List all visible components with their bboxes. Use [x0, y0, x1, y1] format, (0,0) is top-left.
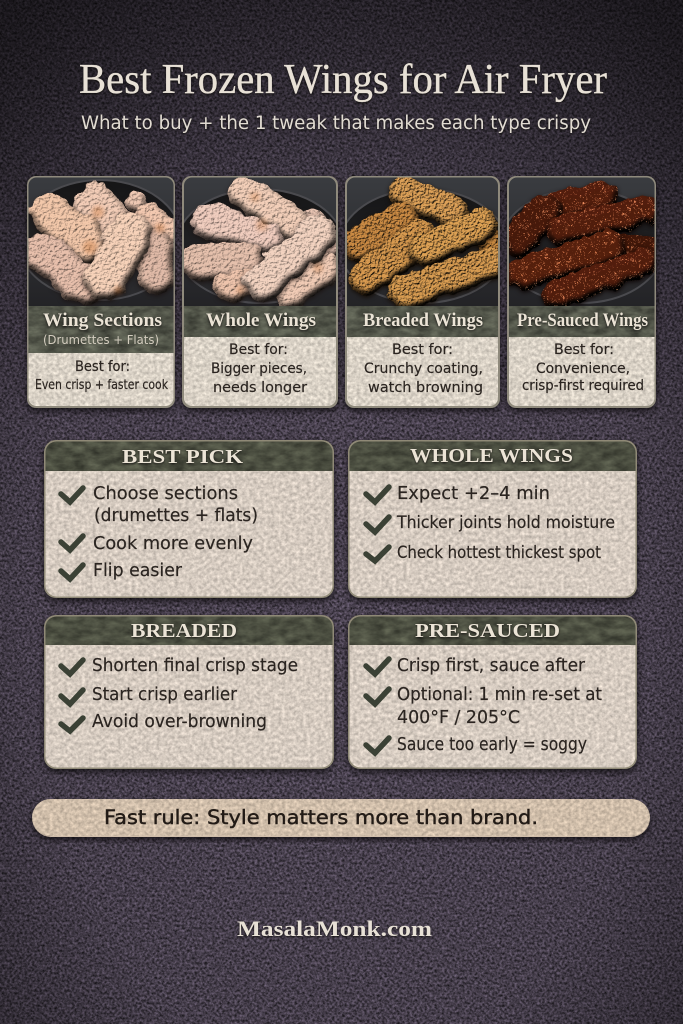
best for text: pre-sauced wings: Best for: — [554, 342, 614, 358]
panel: breaded tips — [44, 615, 334, 769]
photo: pre-sauced wings in bowl — [509, 178, 654, 306]
heading: breaded tips: BREADED — [131, 620, 237, 642]
card heading: pre-sauced wings: Pre-Sauced Wings — [517, 311, 648, 331]
photo: whole wings in bowl — [184, 178, 336, 306]
header band: whole wings tips — [348, 440, 637, 471]
best for text: whole wings: Best for: — [229, 342, 288, 358]
checklist: best pick: Choose sections — [93, 484, 238, 504]
panel: breaded wings card — [339, 176, 507, 408]
checklist: best pick: Flip easier — [93, 561, 183, 581]
card subheading: (Drumettes + Flats) — [43, 332, 159, 347]
heading: whole wings tips: WHOLE WINGS — [410, 445, 573, 467]
checklist: pre-sauced tips: Crisp first, sauce after — [397, 656, 586, 676]
best for text: pre-sauced wings: crisp-first required — [522, 378, 644, 394]
best for text: whole wings: needs longer — [213, 380, 307, 396]
heading: best pick: BEST PICK — [122, 446, 243, 468]
header band: wing sections — [27, 306, 175, 353]
body panel: breaded tips — [44, 645, 334, 769]
checklist: whole wings tips: Thicker joints hold moisture — [396, 513, 615, 532]
footer: site name: MasalaMonk.com — [237, 916, 432, 941]
checklist: pre-sauced tips: Sauce too early = soggy — [397, 735, 587, 755]
checklist: whole wings tips — [366, 484, 615, 562]
checklist: breaded tips: Shorten final crisp stage — [92, 656, 298, 676]
checklist: best pick — [61, 484, 258, 581]
best for text: breaded wings: watch browning — [368, 380, 483, 396]
header band: pre-sauced wings — [507, 306, 656, 337]
header band: breaded tips — [44, 615, 334, 645]
best for text: whole wings — [211, 342, 307, 396]
photo: breaded wings in bowl — [347, 178, 498, 306]
checklist: best pick: Cook more evenly — [93, 534, 253, 554]
subtitle: What to buy + the 1 tweak that makes each type crispy — [81, 113, 591, 134]
checklist: breaded tips — [61, 656, 298, 732]
photo: wing sections in bowl — [28, 178, 174, 306]
best for text: breaded wings: Best for: — [392, 342, 453, 358]
best for text: wing sections: Even crisp + faster cook — [35, 377, 168, 393]
checklist: breaded tips: Avoid over-browning — [92, 712, 267, 732]
header band: breaded wings — [345, 306, 500, 337]
header band: best pick — [44, 440, 334, 471]
title: Best Frozen Wings for Air Fryer — [79, 57, 607, 103]
card heading: whole wings: Whole Wings — [206, 311, 316, 331]
body panel: pre-sauced wings — [507, 337, 656, 408]
checklist: pre-sauced tips: 400°F / 205°C — [397, 708, 520, 728]
card heading: breaded wings: Breaded Wings — [363, 311, 483, 331]
panel: wing sections card — [18, 176, 182, 408]
best for text: pre-sauced wings — [522, 342, 644, 394]
checklist: whole wings tips: Expect +2–4 min — [397, 484, 550, 504]
body panel: breaded wings — [345, 337, 500, 408]
checklist: best pick: (drumettes + flats) — [94, 506, 258, 526]
best for text: whole wings: Bigger pieces, — [211, 361, 307, 377]
panel: pre-sauced tips — [348, 615, 637, 769]
header band: pre-sauced tips — [348, 615, 637, 645]
callout: fast rule pill — [32, 799, 650, 837]
body panel: best pick — [44, 471, 334, 598]
panel: pre-sauced wings card — [500, 176, 664, 408]
body panel: pre-sauced tips — [348, 645, 637, 769]
body panel: wing sections — [27, 353, 175, 408]
header band: whole wings — [182, 306, 338, 337]
fast rule text: Fast rule: Style matters more than brand. — [104, 806, 538, 829]
best for text: breaded wings: Crunchy coating, — [364, 361, 483, 377]
best for text: breaded wings — [364, 342, 483, 396]
heading: pre-sauced tips: PRE-SAUCED — [415, 620, 560, 642]
body panel: whole wings — [182, 337, 338, 408]
checklist: breaded tips: Start crisp earlier — [92, 685, 238, 705]
best for text: wing sections: Best for: — [75, 359, 130, 375]
card heading: wing sections: Wing Sections — [43, 311, 162, 331]
body panel: whole wings tips — [348, 471, 637, 598]
panel: best pick — [44, 440, 334, 598]
best for text: pre-sauced wings: Convenience, — [536, 361, 630, 377]
checklist: pre-sauced tips: Optional: 1 min re-set at — [397, 685, 602, 705]
panel: whole wings card — [176, 176, 344, 408]
panel: whole wings tips — [348, 440, 637, 598]
checklist: pre-sauced tips — [366, 656, 602, 755]
best for text: wing sections — [35, 359, 168, 393]
checklist: whole wings tips: Check hottest thickest spot — [397, 543, 601, 562]
